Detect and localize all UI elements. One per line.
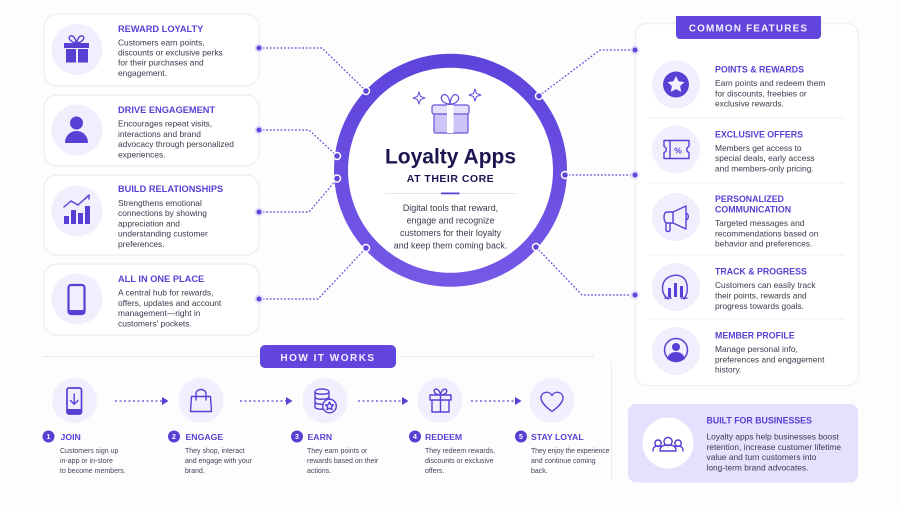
feature: personalized communication: PERSONALIZED xyxy=(715,194,784,204)
step 5: stay loyal: STAY LOYAL xyxy=(531,432,584,442)
panel: built for businesses: long-term brand advocates. xyxy=(706,462,808,472)
step 2: engage: brand. xyxy=(185,468,205,475)
panel: built for businesses xyxy=(628,404,858,482)
icon: team xyxy=(653,438,683,451)
panel: drive engagement: experiences. xyxy=(118,150,166,160)
step 3: earn xyxy=(291,378,379,475)
icon: person xyxy=(65,116,88,143)
feature: member profile: history. xyxy=(715,364,741,374)
arrow xyxy=(240,397,292,405)
step 5: stay loyal xyxy=(515,378,610,475)
step 4: redeem: offers. xyxy=(425,468,444,475)
step 5: stay loyal: back. xyxy=(531,468,548,475)
step 5: stay loyal: 5 xyxy=(519,434,523,441)
panel: reward loyalty: discounts or exclusive perks xyxy=(118,48,223,58)
panel: all in one place xyxy=(44,264,259,335)
panel: build relationships: connections by showing xyxy=(118,208,207,218)
step 4: redeem: REDEEM xyxy=(425,432,462,442)
arrow xyxy=(115,397,168,405)
panel: drive engagement xyxy=(44,95,259,166)
icon: shopping bag xyxy=(190,390,212,412)
feature: points and rewards: POINTS & REWARDS xyxy=(715,64,804,74)
step 5: stay loyal: and continue coming xyxy=(531,458,596,465)
center circle xyxy=(341,61,560,280)
arrow xyxy=(471,397,522,405)
panel: build relationships: BUILD RELATIONSHIPS xyxy=(118,184,223,194)
connector nodes xyxy=(254,44,568,304)
how it works tab xyxy=(260,345,396,368)
step 3: earn: They earn points or xyxy=(307,448,368,455)
description: engage and recognize xyxy=(407,216,494,226)
features tab: COMMON FEATURES xyxy=(689,24,808,34)
connector lines xyxy=(259,48,635,299)
how it works tab: HOW IT WORKS xyxy=(280,353,376,364)
features tab xyxy=(676,16,821,39)
feature: track and progress: progress towards goals. xyxy=(715,301,804,311)
feature: member profile: MEMBER PROFILE xyxy=(715,330,795,340)
heading: Loyalty Apps xyxy=(385,146,516,168)
step 3: earn: EARN xyxy=(308,432,332,442)
step 5: stay loyal: They enjoy the experience xyxy=(531,448,610,455)
panel: reward loyalty: Customers earn points, xyxy=(118,38,205,48)
subheading: AT THEIR CORE xyxy=(407,173,494,185)
step 1: join: 1 xyxy=(47,434,51,441)
step 2: engage: and engage with your xyxy=(185,458,253,465)
icon: coins xyxy=(315,389,336,413)
icon: progress chart xyxy=(662,275,687,299)
panel: reward loyalty: for their purchases and xyxy=(118,58,204,68)
panel: drive engagement: advocacy through personalized xyxy=(118,139,234,149)
feature: track and progress: TRACK & PROGRESS xyxy=(715,266,807,276)
panel: all in one place: offers, updates and account xyxy=(118,298,222,308)
icon: gift with sparkles xyxy=(413,89,481,133)
icon: gift xyxy=(64,36,89,62)
feature: exclusive offers: special deals, early access xyxy=(715,153,815,163)
icon: megaphone xyxy=(664,206,688,232)
panel: reward loyalty: REWARD LOYALTY xyxy=(118,24,204,34)
step 2: engage xyxy=(168,378,253,475)
step 1: join: Customers sign up xyxy=(60,448,118,455)
icon: profile xyxy=(664,338,688,362)
feature: exclusive offers: and members-only pricing. xyxy=(715,164,814,174)
icon: gift outline xyxy=(430,389,451,412)
description: customers for their loyalty xyxy=(400,228,502,238)
panel: drive engagement: Encourages repeat visits, xyxy=(118,118,212,128)
step 4: redeem: 4 xyxy=(413,434,417,441)
step 1: join: in-app or in-store xyxy=(60,458,113,465)
panel: common features xyxy=(630,16,858,386)
feature: track and progress: their points, rewards and xyxy=(715,290,807,300)
panel: built for businesses: retention, increase customer lifetime xyxy=(706,442,841,452)
panel: all in one place: management—right in xyxy=(118,308,201,318)
feature: personalized communication: Targeted messages and xyxy=(715,218,805,228)
panel: build relationships: preferences. xyxy=(118,239,165,249)
feature: personalized communication: behavior and preferences. xyxy=(715,238,812,248)
step 1: join xyxy=(42,378,126,475)
feature: track and progress xyxy=(652,263,816,311)
description xyxy=(394,203,507,250)
panel: build relationships: Strengthens emotional xyxy=(118,198,202,208)
icon: heart xyxy=(541,392,563,412)
arrow xyxy=(358,397,408,405)
panel: all in one place: customers' pockets. xyxy=(118,318,192,328)
panel: built for businesses: value and turn customers into xyxy=(706,452,817,462)
panel: built for businesses: BUILT FOR BUSINESSES xyxy=(706,416,812,426)
panel: all in one place: ALL IN ONE PLACE xyxy=(118,274,204,284)
panel: reward loyalty xyxy=(44,14,259,86)
feature: member profile: Manage personal info, xyxy=(715,344,798,354)
panel: drive engagement: DRIVE ENGAGEMENT xyxy=(118,105,215,115)
step 4: redeem: discounts or exclusive xyxy=(425,458,494,465)
feature: points and rewards: exclusive rewards. xyxy=(715,98,784,108)
description: and keep them coming back. xyxy=(394,240,507,250)
panel: build relationships: appreciation and xyxy=(118,218,180,228)
description: Digital tools that reward, xyxy=(403,203,498,213)
panel: drive engagement: interactions and brand xyxy=(118,129,201,139)
step 1: join: JOIN xyxy=(60,432,81,442)
panel: all in one place: A central hub for rewards, xyxy=(118,288,213,298)
feature: points and rewards: for discounts, freebies or xyxy=(715,88,807,98)
feature: exclusive offers xyxy=(652,126,815,174)
icon: growth chart xyxy=(64,195,90,224)
icon: phone xyxy=(68,285,84,314)
step 2: engage: They shop, interact xyxy=(185,448,245,455)
feature: personalized communication: recommendations based on xyxy=(715,228,819,238)
step 4: redeem xyxy=(409,378,495,475)
feature: exclusive offers: Members get access to xyxy=(715,143,802,153)
step 2: engage: ENGAGE xyxy=(186,432,223,442)
panel: build relationships: understanding customer xyxy=(118,228,208,238)
feature: exclusive offers: EXCLUSIVE OFFERS xyxy=(715,130,803,140)
step 1: join: to become members. xyxy=(60,468,126,475)
step 3: earn: rewards based on their xyxy=(307,458,379,465)
step 3: earn: 3 xyxy=(295,434,299,441)
panel: built for businesses: Loyalty apps help businesses boost xyxy=(706,432,839,442)
panel: reward loyalty: engagement. xyxy=(118,68,167,78)
feature: personalized communication xyxy=(652,193,819,248)
step 2: engage: 2 xyxy=(172,434,176,441)
icon: ticket xyxy=(664,140,689,158)
feature: member profile xyxy=(652,327,825,375)
icon: star badge xyxy=(663,72,689,98)
step 3: earn: actions. xyxy=(307,468,331,475)
feature: member profile: preferences and engagement xyxy=(715,354,825,364)
feature: points and rewards xyxy=(652,60,825,108)
panel: build relationships xyxy=(44,175,259,255)
step 4: redeem: They redeem rewards, xyxy=(425,448,495,455)
icon: ticket: % xyxy=(674,146,682,156)
feature: personalized communication: COMMUNICATION xyxy=(715,204,791,214)
feature: track and progress: Customers can easily track xyxy=(715,280,816,290)
feature: points and rewards: Earn points and redeem them xyxy=(715,78,825,88)
icon: phone download xyxy=(67,388,82,414)
